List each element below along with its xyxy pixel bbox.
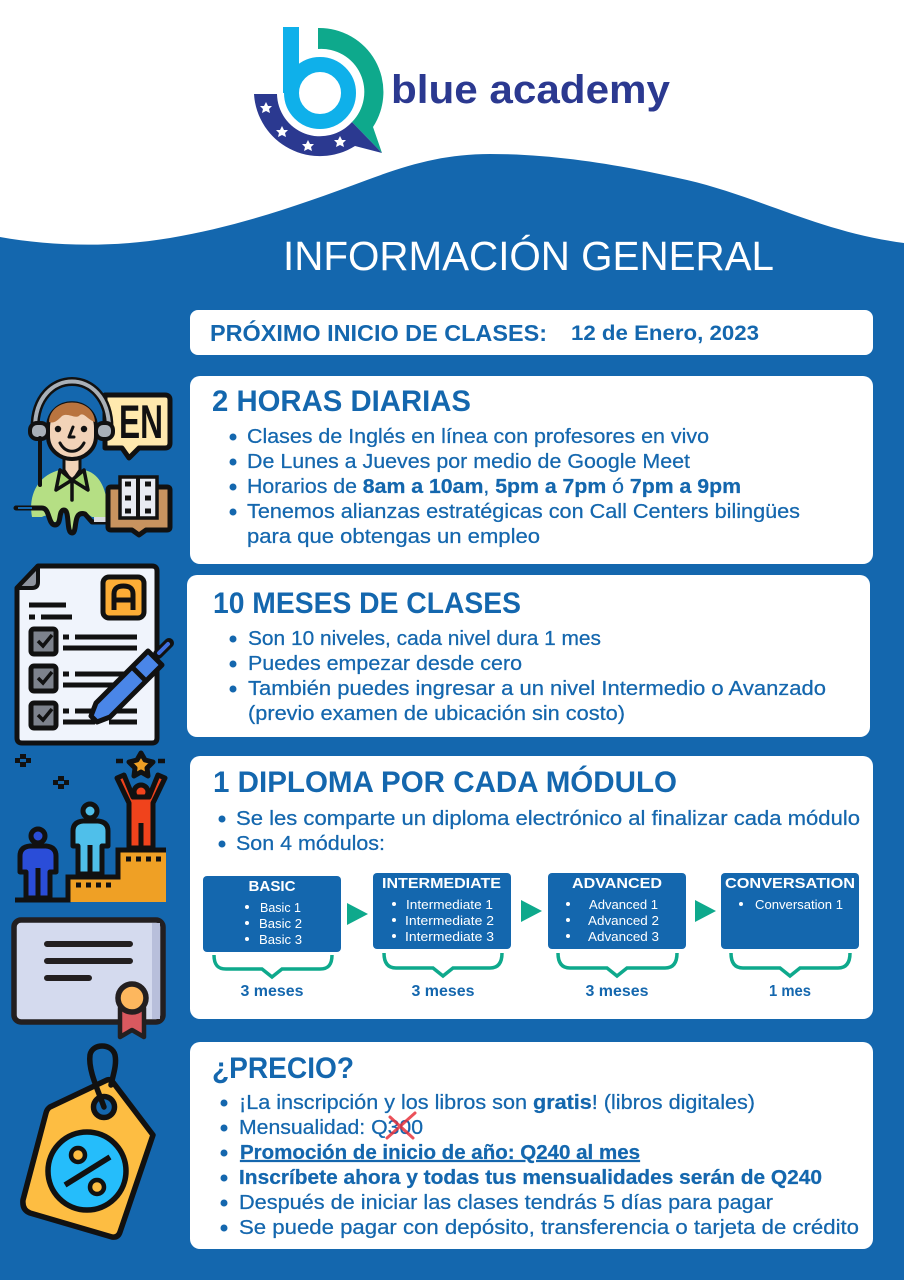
bullet list: Son 10 niveles, cada nivel dura 1 mes <box>248 628 601 650</box>
red cross over old price <box>387 1113 415 1138</box>
bullet list: Mensualidad: Q300 <box>239 1117 423 1139</box>
logo wordmark: blue academy <box>391 68 671 112</box>
bullet list <box>230 628 826 725</box>
module: advanced: Advanced 3 <box>588 929 659 944</box>
bullet list: Tenemos alianzas estratégicas con Call Centers bilingües <box>247 501 800 523</box>
bullet list: Horarios de 8am a 10am , 5pm a 7pm ó 7pm a 9pm <box>247 476 741 498</box>
panel: price <box>190 1042 873 1249</box>
bullet list: Se puede pagar con depósito, transferencia o tarjeta de crédito <box>239 1217 859 1239</box>
module: basic: Basic 1 <box>260 900 301 915</box>
bracket: intermediate 3 months <box>384 953 502 1000</box>
bullet list: De Lunes a Jueves por medio de Google Meet <box>247 451 690 473</box>
bullet list: Después de iniciar las clases tendrás 5 días para pagar <box>239 1192 773 1214</box>
module: conversation: CONVERSATION <box>725 875 855 892</box>
bracket: conversation 1 month: 1 mes <box>769 983 811 1000</box>
module: intermediate <box>373 873 511 949</box>
bullet list <box>218 808 860 855</box>
arrow <box>347 903 368 925</box>
module: basic: BASIC <box>248 878 296 895</box>
panel: 2 hours daily <box>190 376 873 564</box>
module: advanced: ADVANCED <box>572 875 662 892</box>
white wave header <box>0 0 904 245</box>
arrow <box>521 900 542 922</box>
module: basic: Basic 3 <box>259 932 302 947</box>
heading: 2 HORAS DIARIAS <box>212 385 471 418</box>
start date: 12 de Enero, 2023 <box>571 322 759 345</box>
bullet list <box>230 426 800 548</box>
bracket: intermediate 3 months: 3 meses <box>412 983 475 1000</box>
module: basic <box>203 876 341 952</box>
bracket: advanced 3 months <box>558 953 677 1000</box>
module: advanced: Advanced 2 <box>588 913 659 928</box>
heading: ¿PRECIO? <box>212 1052 354 1085</box>
bullet list: Inscríbete ahora y todas tus mensualidades serán de Q240 <box>239 1167 822 1189</box>
module: advanced <box>548 873 686 949</box>
bullet list <box>220 1092 859 1239</box>
panel: next class start <box>190 310 873 355</box>
start label: PRÓXIMO INICIO DE CLASES: <box>210 319 547 346</box>
icon: people climbing podium <box>15 753 166 902</box>
module: advanced: Advanced 1 <box>589 897 658 912</box>
module: intermediate: Intermediate 1 <box>406 897 493 912</box>
bracket: basic 3 months: 3 meses <box>240 983 304 1000</box>
module: basic: Basic 2 <box>259 916 302 931</box>
title: INFORMACIÓN GENERAL <box>283 233 774 279</box>
bracket: conversation 1 month <box>731 953 850 1000</box>
icon: teacher with headset, EN bubble and book: EN <box>119 395 163 448</box>
bullet list: para que obtengas un empleo <box>247 526 540 548</box>
module: intermediate: Intermediate 2 <box>405 913 494 928</box>
icon: price tag with percent <box>23 1046 153 1237</box>
module: intermediate: INTERMEDIATE <box>382 875 501 892</box>
bullet list: Clases de Inglés en línea con profesores en vivo <box>247 426 709 448</box>
bracket: basic 3 months <box>214 955 332 1000</box>
heading: 10 MESES DE CLASES <box>213 587 521 620</box>
module: conversation <box>721 873 859 949</box>
panel: 10 months of classes <box>187 575 870 737</box>
bullet list: Se les comparte un diploma electrónico al finalizar cada módulo <box>236 808 860 830</box>
bullet list: Puedes empezar desde cero <box>248 653 522 675</box>
panel: diploma per module <box>190 756 873 1019</box>
bullet list: Son 4 módulos: <box>236 833 385 855</box>
heading: 1 DIPLOMA POR CADA MÓDULO <box>213 765 677 799</box>
icon: certificate with seal <box>14 920 163 1037</box>
bullet list: También puedes ingresar a un nivel Intermedio o Avanzado <box>248 678 826 700</box>
bullet list: (previo examen de ubicación sin costo) <box>248 703 625 725</box>
module: conversation: Conversation 1 <box>755 897 843 912</box>
bullet list: ¡La inscripción y los libros son gratis! (libros digitales) <box>239 1092 755 1114</box>
bullet list: Promoción de inicio de año: Q240 al mes <box>240 1142 640 1164</box>
icon: teacher with headset, EN bubble and book <box>16 382 170 535</box>
icon: exam document with pen <box>17 566 169 743</box>
logo <box>254 27 671 156</box>
module: intermediate: Intermediate 3 <box>405 929 494 944</box>
arrow <box>695 900 716 922</box>
bracket: advanced 3 months: 3 meses <box>586 983 649 1000</box>
